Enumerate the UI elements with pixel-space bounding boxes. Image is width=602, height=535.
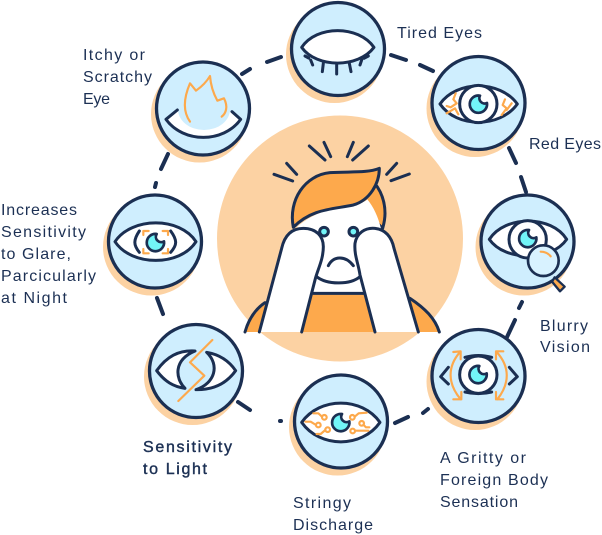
icon: blurry vision (476, 195, 574, 296)
hair front (292, 168, 379, 227)
label: blurry vision: Vision (540, 339, 590, 356)
icon: gritty or foreign body (426, 330, 525, 430)
label: itchy or scratchy eye (83, 47, 152, 108)
label: itchy or scratchy eye: Itchy or (83, 47, 146, 64)
label: blurry vision: Blurry (540, 318, 588, 335)
right eye (349, 227, 358, 236)
label: red eyes: Red Eyes (529, 136, 601, 153)
label: sensitivity to light (143, 439, 232, 478)
dashed ring connecting symptoms (155, 55, 526, 423)
icon: stringy discharge (289, 375, 388, 476)
burst lines (274, 142, 409, 181)
label: blurry vision (540, 318, 590, 356)
label: sensitivity to glare: Sensitivity (1, 224, 86, 241)
right arm (355, 228, 418, 332)
label: tired eyes: Tired Eyes (397, 25, 482, 42)
central peach circle (217, 116, 463, 362)
label: stringy discharge: Discharge (293, 517, 373, 534)
icon: sensitivity to glare (103, 195, 202, 296)
label: gritty or foreign body: Sensation (440, 494, 518, 511)
label: itchy or scratchy eye: Scratchy (83, 69, 152, 86)
label: gritty or foreign body: Foreign Body (440, 472, 548, 489)
label: stringy discharge: Stringy (293, 495, 351, 512)
label: stringy discharge (293, 495, 373, 534)
icon: red eyes (426, 56, 525, 157)
icon: sensitivity to light (144, 324, 242, 425)
label: sensitivity to light: Sensitivity (143, 439, 232, 456)
label: sensitivity to glare: at Night (1, 290, 68, 307)
icon: tired eyes (286, 2, 384, 103)
label: itchy or scratchy eye: Eye (83, 91, 110, 108)
label: sensitivity to glare: to Glare, (1, 246, 71, 263)
label: gritty or foreign body: A Gritty or (440, 450, 527, 467)
left eye (320, 227, 328, 236)
shoulders (245, 298, 439, 332)
label: sensitivity to glare: Parcicularly (1, 268, 96, 285)
label: sensitivity to glare: Increases (1, 202, 77, 219)
figure: person covering eyes (245, 142, 439, 332)
shirt collar (313, 289, 363, 298)
label: gritty or foreign body (440, 450, 548, 511)
mouth (328, 258, 353, 266)
label: sensitivity to light: to Light (143, 461, 208, 478)
icon: itchy or scratchy eye (151, 62, 250, 162)
face and neck (297, 199, 381, 293)
label: sensitivity to glare (1, 202, 96, 307)
hair back (357, 177, 385, 228)
torso (297, 294, 380, 332)
left arm (259, 228, 323, 332)
